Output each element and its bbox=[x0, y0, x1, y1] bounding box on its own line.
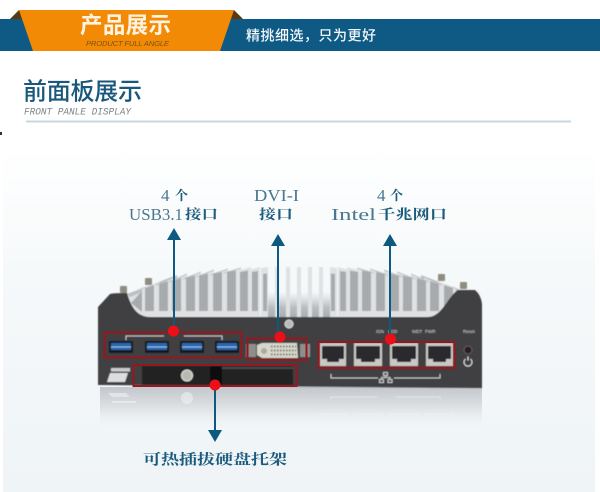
banner subtitle: PRODUCT FULL ANGLE bbox=[86, 39, 170, 48]
Gigabit LAN ports bbox=[320, 343, 453, 366]
indicator labels: WDT bbox=[412, 329, 422, 334]
USB 3.1 ports bbox=[109, 341, 239, 353]
indicator labels: LOD bbox=[388, 329, 398, 334]
label: USB: USB3.1 bbox=[129, 205, 183, 224]
banner slogan: 精挑细选，只为更好 bbox=[246, 28, 376, 44]
label: LAN: 千兆网口 bbox=[378, 203, 447, 223]
arrow: DVI bbox=[271, 234, 286, 342]
top screw bbox=[285, 320, 293, 328]
section heading bbox=[23, 78, 571, 122]
device: fanless computer bbox=[98, 267, 482, 388]
banner blue stripe bbox=[0, 19, 600, 51]
label: LAN: 4 bbox=[377, 186, 386, 205]
label: DVI: 接口 bbox=[259, 203, 293, 223]
indicator labels: IGN bbox=[376, 329, 384, 334]
arrow: USB bbox=[167, 228, 181, 336]
heading title: 前面板展示 bbox=[23, 78, 142, 106]
drive logo bbox=[107, 368, 130, 382]
edge mark bbox=[0, 132, 2, 135]
label: USB: 4 bbox=[161, 186, 170, 205]
hot-swap drive tray bbox=[142, 366, 293, 385]
banner title: 产品展示 bbox=[80, 13, 171, 38]
label: LAN: Intel bbox=[331, 205, 376, 224]
power icon bbox=[464, 356, 472, 366]
label: USB: 接口 bbox=[185, 203, 218, 223]
reset button bbox=[464, 346, 472, 354]
heading subtitle: FRONT PANLE DISPLAY bbox=[24, 106, 132, 118]
banner fold corners bbox=[10, 10, 243, 19]
arrow: LAN bbox=[383, 234, 397, 344]
banner: product full angle bbox=[0, 10, 600, 51]
heatsink fins bbox=[127, 267, 471, 320]
banner orange tab bbox=[19, 10, 234, 51]
LAN bracket and network icon bbox=[331, 372, 440, 382]
arrow: drive tray bbox=[208, 380, 222, 442]
chassis body bbox=[98, 290, 482, 388]
label: DVI bbox=[254, 186, 299, 223]
label: LAN bbox=[331, 185, 447, 224]
DVI-I port bbox=[246, 343, 310, 358]
label: USB: 个 bbox=[175, 185, 188, 204]
indicator labels bbox=[376, 329, 476, 334]
indicator labels: PWR bbox=[425, 329, 436, 334]
label: USB bbox=[129, 185, 218, 224]
mounting screws bbox=[120, 274, 467, 293]
label: DVI: DVI-I bbox=[254, 186, 299, 205]
label: hot-swap drive tray: 可热插拔硬盘托架 bbox=[143, 448, 288, 470]
highlight: USB ports bbox=[104, 332, 242, 358]
panel: product background bbox=[3, 147, 595, 492]
highlight: LAN ports bbox=[318, 342, 454, 368]
highlight: drive tray bbox=[134, 365, 296, 386]
heading rule bbox=[26, 120, 571, 122]
highlight: DVI port bbox=[248, 338, 306, 360]
label: LAN: 个 bbox=[390, 185, 403, 204]
USB bracket bbox=[126, 336, 222, 340]
device reflection bbox=[100, 387, 482, 428]
indicator labels: Reset bbox=[463, 329, 476, 334]
